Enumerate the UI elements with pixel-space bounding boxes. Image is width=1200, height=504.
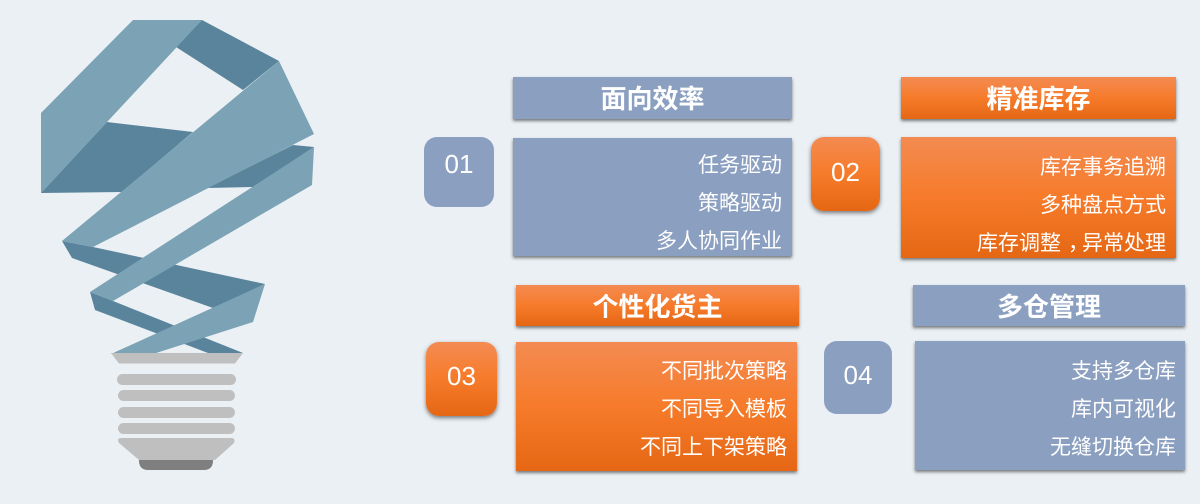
- number badge 04: 04: [844, 360, 872, 390]
- text block: owner items: 不同导入模板: [661, 398, 787, 421]
- panel: 02 inventory: [808, 76, 1178, 262]
- text block: efficiency items: 任务驱动: [698, 154, 782, 177]
- text block: warehouse items: 支持多仓库: [1071, 360, 1176, 383]
- text block: efficiency items: 策略驱动: [698, 192, 782, 215]
- panel: 03 owner: [423, 284, 802, 476]
- text block: warehouse items: 无缝切换仓库: [1050, 436, 1176, 459]
- text block: warehouse items: [915, 341, 1185, 470]
- icon: folded ribbon light bulb: [41, 20, 314, 470]
- heading: 面向效率: 面向效率: [600, 84, 704, 114]
- bulb screw base: [111, 353, 243, 470]
- number badge 03: 03: [447, 361, 476, 391]
- text block: efficiency items: 多人协同作业: [656, 230, 782, 253]
- heading: 精准库存: [901, 77, 1176, 119]
- text block: owner items: [516, 342, 797, 471]
- panel: 04 warehouses: [824, 284, 1188, 474]
- heading: 个性化货主: 个性化货主: [592, 292, 722, 322]
- heading: 多仓管理: 多仓管理: [997, 292, 1101, 322]
- text block: warehouse items: 库内可视化: [1071, 398, 1176, 421]
- number badge 02: [811, 137, 880, 211]
- text block: efficiency items: [513, 138, 792, 256]
- text block: owner items: 不同上下架策略: [640, 436, 787, 459]
- text block: owner items: 不同批次策略: [661, 360, 787, 383]
- text block: inventory items: 库存事务追溯: [1040, 156, 1166, 179]
- panel: 01 efficiency: [424, 76, 794, 260]
- number badge 01: 01: [445, 149, 473, 179]
- heading: 个性化货主: [516, 285, 799, 326]
- number badge 02: 02: [831, 157, 860, 187]
- text block: inventory items: 多种盘点方式: [1040, 194, 1166, 217]
- text block: inventory items: 库存调整 ，异常处理: [977, 232, 1166, 255]
- heading: 面向效率: [513, 77, 792, 119]
- text block: inventory items: [901, 137, 1176, 258]
- number badge 04: [824, 341, 892, 414]
- heading: 多仓管理: [913, 285, 1185, 326]
- heading: 精准库存: 精准库存: [986, 84, 1090, 114]
- number badge 01: [424, 137, 494, 207]
- number badge 03: [426, 342, 497, 416]
- bulb glass: folded ribbon: [41, 20, 314, 354]
